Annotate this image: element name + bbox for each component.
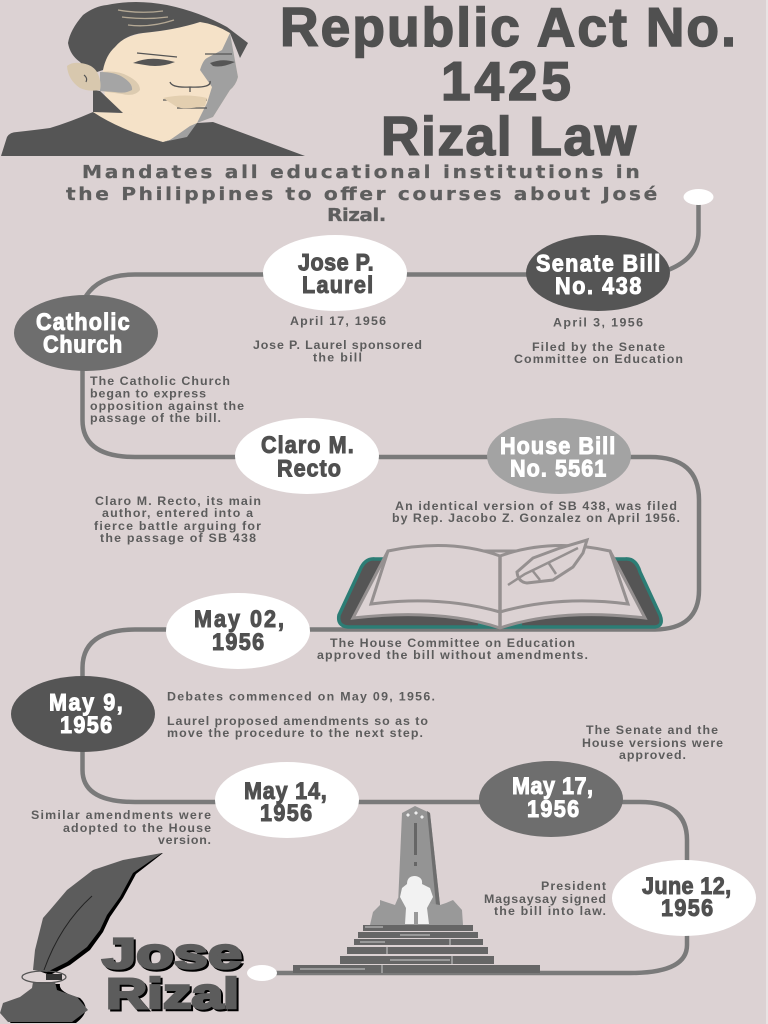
text: Claro M. Recto battle: Claro M. Recto, its main (95, 494, 261, 508)
text: House bill filing: by Rep. Jacobo Z. Gonzalez on April 1956. (392, 511, 680, 525)
node: May 02, 1956 (166, 593, 310, 669)
text: Catholic Church opposition: The Catholic Church (90, 374, 230, 388)
icon: Rizal monument (293, 806, 540, 973)
text: Magsaysay signing: President (541, 879, 606, 893)
icon: open book with feather (339, 540, 661, 628)
node: May 14, 1956: May 14, (244, 777, 327, 804)
text: Magsaysay signing (484, 879, 606, 918)
subtitle (66, 161, 657, 226)
subtitle: Mandates all educational institutions in (82, 161, 640, 183)
node: June 12, 1956 (612, 860, 756, 936)
text: Catholic Church opposition: began to express (90, 386, 206, 400)
text: Catholic Church opposition: passage of the bill. (90, 411, 221, 425)
subtitle: the Philippines to offer courses about José (66, 183, 657, 205)
text: House bill filing: An identical version of SB 438, was filed (395, 499, 677, 513)
node: Jose P. Laurel: Jose P. (298, 248, 374, 276)
node: May 9, 1956: 1956 (60, 711, 112, 738)
title: 1425 (441, 51, 571, 112)
text: Claro M. Recto battle: the passage of SB 438 (100, 531, 256, 545)
text: Laurel sponsorship (253, 314, 422, 364)
text: versions approved: House versions were (582, 736, 723, 750)
node: Senate Bill No. 438 (526, 235, 670, 311)
portrait of Jose Rizal (1, 2, 305, 156)
node: May 17, 1956: May 17, (512, 772, 593, 799)
title: Rizal Law (381, 106, 637, 167)
text: debates and amendments: Laurel proposed amendments so as to (167, 714, 428, 728)
icon: quill and inkwell (0, 853, 163, 1023)
text: Senate bill filing: Committee on Education (514, 352, 683, 366)
text: versions approved: approved. (619, 748, 686, 762)
timeline end dot (247, 965, 277, 981)
text: similar amendments (31, 808, 211, 847)
logo text: Jose Rizal (102, 930, 244, 1020)
node: Catholic Church: Catholic (36, 308, 130, 335)
text: Magsaysay signing: Magsaysay signed (484, 892, 606, 906)
text: versions approved: The Senate and the (586, 723, 718, 737)
text: Magsaysay signing: the bill into law. (494, 904, 606, 918)
node: House Bill No. 5561 (487, 418, 631, 494)
node: May 9, 1956 (11, 676, 155, 752)
text: Laurel sponsorship: Jose P. Laurel sponsored (253, 338, 422, 352)
node: Jose P. Laurel: Laurel (302, 271, 373, 298)
node: Claro M. Recto: Claro M. (261, 431, 354, 458)
text: House Committee approval (317, 636, 588, 662)
node: June 12, 1956: 1956 (661, 894, 713, 921)
logo text: Jose Rizal: Rizal (108, 972, 241, 1020)
text: Senate bill filing (514, 316, 683, 366)
text: debates and amendments (167, 690, 435, 740)
node: May 9, 1956: May 9, (49, 688, 123, 716)
text: House Committee approval: approved the bill without amendments. (317, 648, 588, 662)
node: May 02, 1956: 1956 (212, 628, 264, 655)
node: Catholic Church: Church (43, 330, 122, 358)
text: debates and amendments: Debates commenced on May 09, 1956. (167, 690, 435, 704)
text: similar amendments: version. (158, 833, 211, 847)
text: similar amendments: adopted to the House (63, 821, 211, 835)
logo text: Jose Rizal: Jose (102, 930, 242, 978)
node: House Bill No. 5561: No. 5561 (510, 454, 607, 482)
logo text: Jose Rizal: Rizal (106, 970, 239, 1018)
text: House Committee approval: The House Committee on Education (330, 636, 575, 650)
text: Laurel sponsorship: April 17, 1956 (290, 314, 386, 328)
node: Claro M. Recto (235, 418, 379, 494)
text: Claro M. Recto battle: fierce battle arguing for (94, 519, 261, 533)
text: debates and amendments: move the procedure to the next step. (167, 726, 423, 740)
text: versions approved (582, 723, 723, 762)
text: House bill filing (392, 499, 680, 525)
title (280, 0, 736, 167)
timeline start dot (684, 189, 714, 205)
text: similar amendments: Similar amendments were (31, 808, 211, 822)
timeline connector (82, 200, 699, 973)
node: Senate Bill No. 438: Senate Bill (536, 249, 660, 277)
text: Claro M. Recto battle (94, 494, 261, 545)
text: Laurel sponsorship: the bill (313, 350, 362, 364)
node: May 17, 1956: 1956 (527, 795, 579, 822)
subtitle: Rizal. (327, 204, 386, 226)
node: Claro M. Recto: Recto (277, 454, 341, 482)
text: Catholic Church opposition (90, 374, 244, 425)
node: Senate Bill No. 438: No. 438 (555, 272, 641, 299)
text: Catholic Church opposition: opposition against the (90, 399, 244, 413)
text: Senate bill filing: April 3, 1956 (553, 316, 643, 330)
text: Claro M. Recto battle: author, entered into a (102, 506, 253, 520)
text: Senate bill filing: Filed by the Senate (532, 340, 665, 354)
node: House Bill No. 5561: House Bill (500, 432, 615, 459)
node: Jose P. Laurel (263, 235, 407, 311)
logo text: Jose Rizal: Jose (104, 932, 244, 980)
node: June 12, 1956: June 12, (642, 872, 731, 899)
node: May 17, 1956 (479, 761, 623, 837)
node: May 14, 1956 (215, 762, 359, 838)
node: Catholic Church (14, 295, 158, 371)
node: May 02, 1956: May 02, (194, 605, 284, 632)
node: May 14, 1956: 1956 (260, 799, 312, 826)
